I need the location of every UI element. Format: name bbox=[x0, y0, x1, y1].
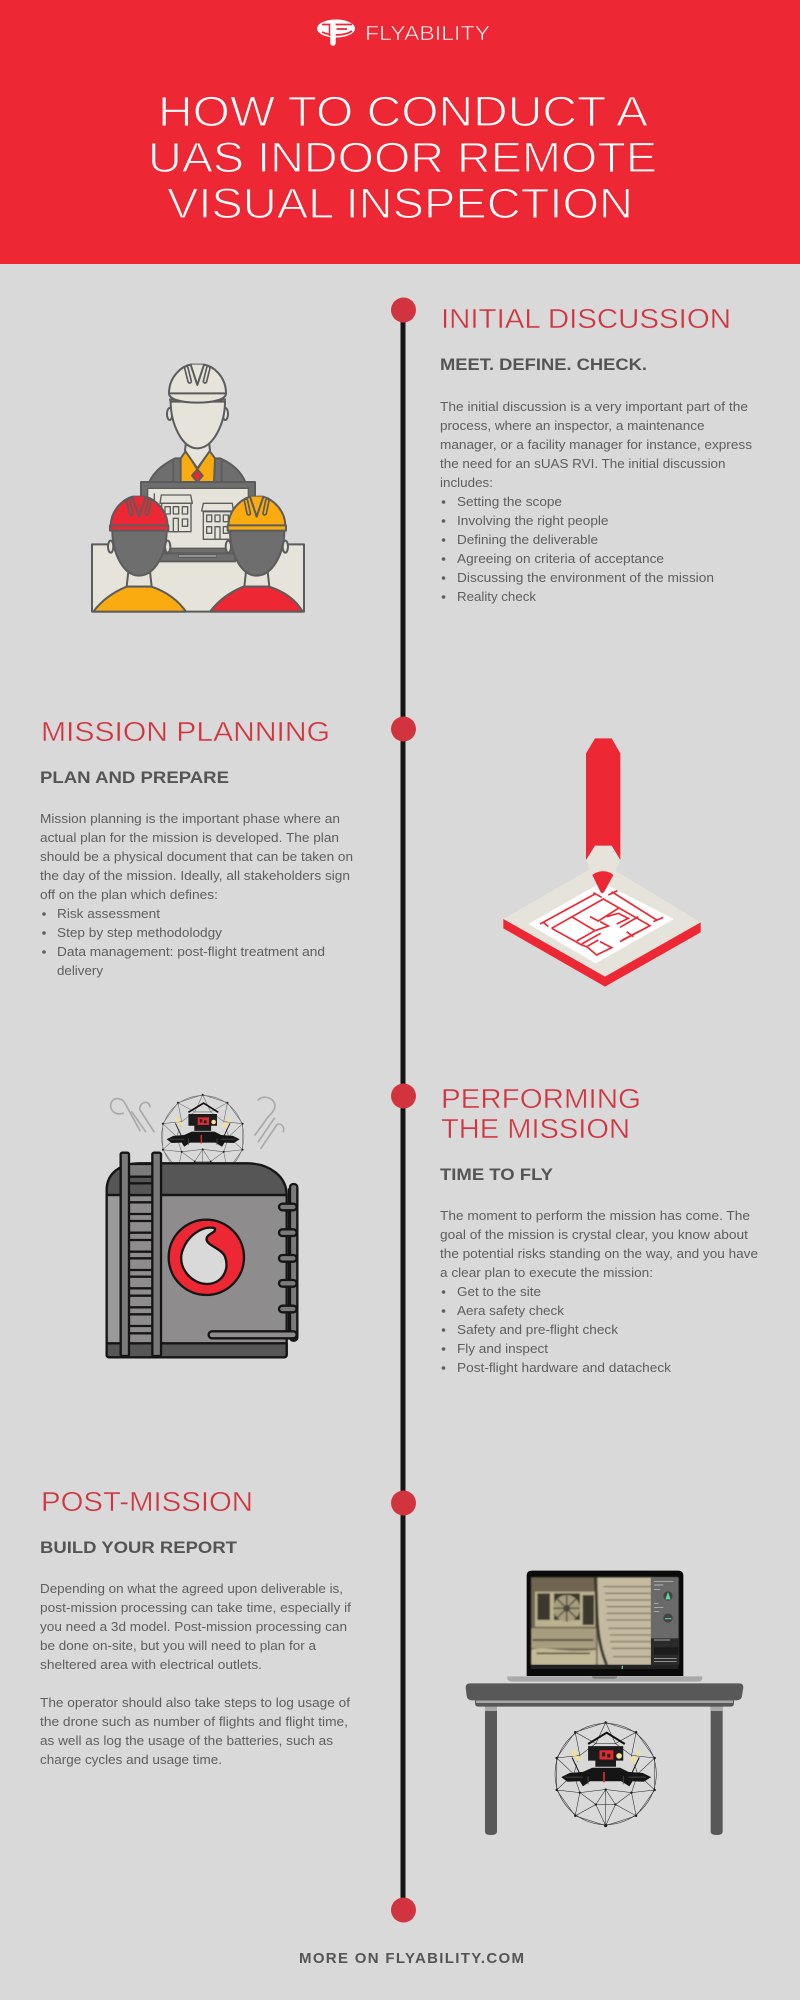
body text bbox=[440, 1208, 758, 1280]
bullet list: Reality check bbox=[457, 589, 536, 604]
icon: drone above a storage tank bbox=[107, 1094, 297, 1357]
pencil bbox=[586, 738, 620, 893]
body paragraph 1: sheltered area with electrical outlets. bbox=[40, 1657, 262, 1672]
body paragraph 2: the drone such as number of flights and flight time, bbox=[40, 1714, 348, 1729]
bullet list: Fly and inspect bbox=[457, 1341, 548, 1356]
body paragraph 1: Depending on what the agreed upon deliverable is, bbox=[40, 1581, 343, 1596]
title: UAS INDOOR REMOTE bbox=[148, 135, 657, 182]
heading: mission planning: MISSION PLANNING bbox=[41, 716, 330, 747]
bullet list: Involving the right people bbox=[457, 513, 608, 528]
bullet list: Setting the scope bbox=[457, 494, 562, 509]
laptop bbox=[141, 482, 255, 561]
laptop bbox=[507, 1571, 702, 1682]
body paragraph 1: you need a 3d model. Post-mission processing can bbox=[40, 1619, 347, 1634]
body text: The initial discussion is a very important part of the bbox=[440, 399, 748, 414]
bullet list: Risk assessment bbox=[57, 906, 160, 921]
icon: inspector and two workers around a laptop bbox=[92, 365, 304, 612]
bullet list: Get to the site bbox=[457, 1284, 541, 1299]
body text: off on the plan which defines: bbox=[40, 887, 218, 902]
body text: includes: bbox=[440, 475, 493, 490]
heading: performing the mission: THE MISSION bbox=[441, 1113, 630, 1144]
heading: performing the mission bbox=[441, 1083, 641, 1144]
tank logo bbox=[169, 1220, 244, 1295]
bullet list: delivery bbox=[57, 963, 103, 978]
body paragraph 2 bbox=[40, 1695, 350, 1767]
body text: should be a physical document that can be taken on bbox=[40, 849, 353, 864]
title: HOW TO CONDUCT A bbox=[158, 89, 649, 136]
bullet list: Defining the deliverable bbox=[457, 532, 598, 547]
body text: a clear plan to execute the mission: bbox=[440, 1265, 653, 1280]
footer link: MORE ON FLYABILITY.COM bbox=[299, 1950, 524, 1967]
body paragraph 1: be done on-site, but you will need to plan for a bbox=[40, 1638, 317, 1653]
tank body bbox=[107, 1193, 287, 1357]
body text bbox=[40, 811, 353, 902]
bullet list: Data management: post-flight treatment and bbox=[57, 944, 325, 959]
icon: pencil drawing a floor plan bbox=[503, 738, 701, 987]
worker: red helmet bbox=[93, 497, 186, 612]
drone in cage bbox=[162, 1094, 244, 1180]
body paragraph 2: The operator should also take steps to log usage of bbox=[40, 1695, 350, 1710]
body text bbox=[440, 399, 752, 490]
body text: goal of the mission is crystal clear, you know about bbox=[440, 1227, 748, 1242]
bullet list: Post-flight hardware and datacheck bbox=[457, 1360, 671, 1375]
bullet list: Safety and pre-flight check bbox=[457, 1322, 618, 1337]
subheading: plan and prepare: PLAN AND PREPARE bbox=[40, 768, 229, 787]
subheading: meet define check: MEET. DEFINE. CHECK. bbox=[440, 355, 647, 374]
desk bbox=[466, 1683, 743, 1835]
timeline bbox=[391, 298, 416, 1922]
body text: the day of the mission. Ideally, all stakeholders sign bbox=[40, 868, 350, 883]
bullet list bbox=[42, 906, 325, 978]
bullet list: Discussing the environment of the mission bbox=[457, 570, 714, 585]
body paragraph 2: as well as log the usage of the batteries, such as bbox=[40, 1733, 333, 1748]
body text: actual plan for the mission is developed. The plan bbox=[40, 830, 339, 845]
section: performing the mission text bbox=[440, 1083, 758, 1375]
ladder bbox=[121, 1153, 161, 1356]
body text: process, where an inspector, a maintenance bbox=[440, 418, 704, 433]
smoke swirls bbox=[111, 1097, 284, 1148]
body text: manager, or a facility manager for instance, express bbox=[440, 437, 752, 452]
bullet list: Agreeing on criteria of acceptance bbox=[457, 551, 664, 566]
title: VISUAL INSPECTION bbox=[167, 181, 633, 228]
bullet list: Step by step methodolodgy bbox=[57, 925, 222, 940]
subheading: build your report: BUILD YOUR REPORT bbox=[40, 1538, 238, 1557]
body paragraph 1 bbox=[40, 1581, 351, 1672]
body paragraph 1: post-mission processing can take time, especially if bbox=[40, 1600, 351, 1615]
body text: The moment to perform the mission has come. The bbox=[440, 1208, 750, 1223]
section: mission planning text bbox=[40, 716, 353, 978]
body text: the need for an sUAS RVI. The initial discussion bbox=[440, 456, 726, 471]
heading: performing the mission: PERFORMING bbox=[441, 1083, 641, 1114]
bullet list bbox=[442, 1284, 671, 1375]
pipe rack bbox=[209, 1184, 297, 1341]
body text: the potential risks standing on the way, and you have bbox=[440, 1246, 758, 1261]
heading: initial discussion: INITIAL DISCUSSION bbox=[441, 303, 731, 334]
header band bbox=[0, 0, 800, 264]
section: post-mission text bbox=[40, 1486, 351, 1767]
logo: Flyability: FLYABILITY bbox=[365, 22, 490, 45]
subheading: time to fly: TIME TO FLY bbox=[440, 1165, 554, 1184]
heading: post-mission: POST-MISSION bbox=[41, 1486, 253, 1517]
bullet list: Aera safety check bbox=[457, 1303, 564, 1318]
worker: orange helmet bbox=[210, 497, 303, 612]
logo: Flyability bbox=[317, 20, 490, 45]
section: initial discussion text bbox=[440, 303, 752, 604]
bullet list bbox=[442, 494, 714, 604]
icon: laptop on a desk with a drone underneath bbox=[466, 1571, 743, 1835]
title bbox=[148, 89, 657, 228]
body text: Mission planning is the important phase where an bbox=[40, 811, 340, 826]
drone in cage bbox=[555, 1721, 656, 1827]
body paragraph 2: charge cycles and usage time. bbox=[40, 1752, 222, 1767]
